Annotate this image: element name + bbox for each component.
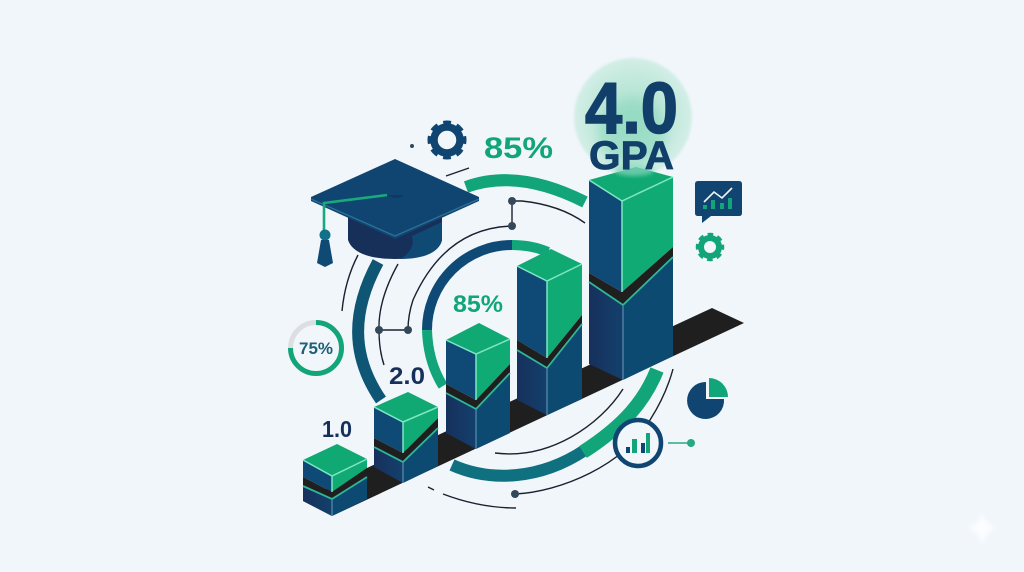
progress ring 75%: 75%	[299, 339, 333, 358]
icon: pie chart	[687, 378, 728, 419]
top stat 85%: 85%	[484, 132, 553, 165]
inner stat 85%: 85%	[453, 291, 503, 318]
bar 1	[303, 444, 367, 516]
bar 4	[517, 249, 582, 415]
bar label 2.0: 2.0	[389, 363, 425, 390]
bar 2	[374, 392, 438, 483]
graduation cap	[311, 159, 479, 267]
bar 3	[446, 323, 510, 449]
connector with green dot	[668, 439, 695, 447]
inner progress ring	[427, 245, 548, 386]
black floor of chart	[303, 308, 744, 516]
icon: circular bar chart badge	[615, 420, 661, 466]
icon: chat bubble with chart	[695, 181, 742, 223]
glow behind 4.0 GPA	[574, 58, 692, 176]
connector nodes	[375, 144, 519, 498]
headline value 4.0: 4.0	[585, 69, 678, 149]
thin orbit lines	[342, 168, 673, 508]
headline label GPA: GPA	[589, 134, 674, 178]
watermark sparkle	[966, 512, 998, 546]
progress ring 75%	[290, 322, 342, 374]
bar label 1.0: 1.0	[322, 416, 352, 442]
icon: green gear	[698, 234, 722, 260]
bar 5	[589, 164, 673, 380]
icon: navy gear	[430, 123, 464, 157]
outer progress ring	[358, 180, 657, 476]
